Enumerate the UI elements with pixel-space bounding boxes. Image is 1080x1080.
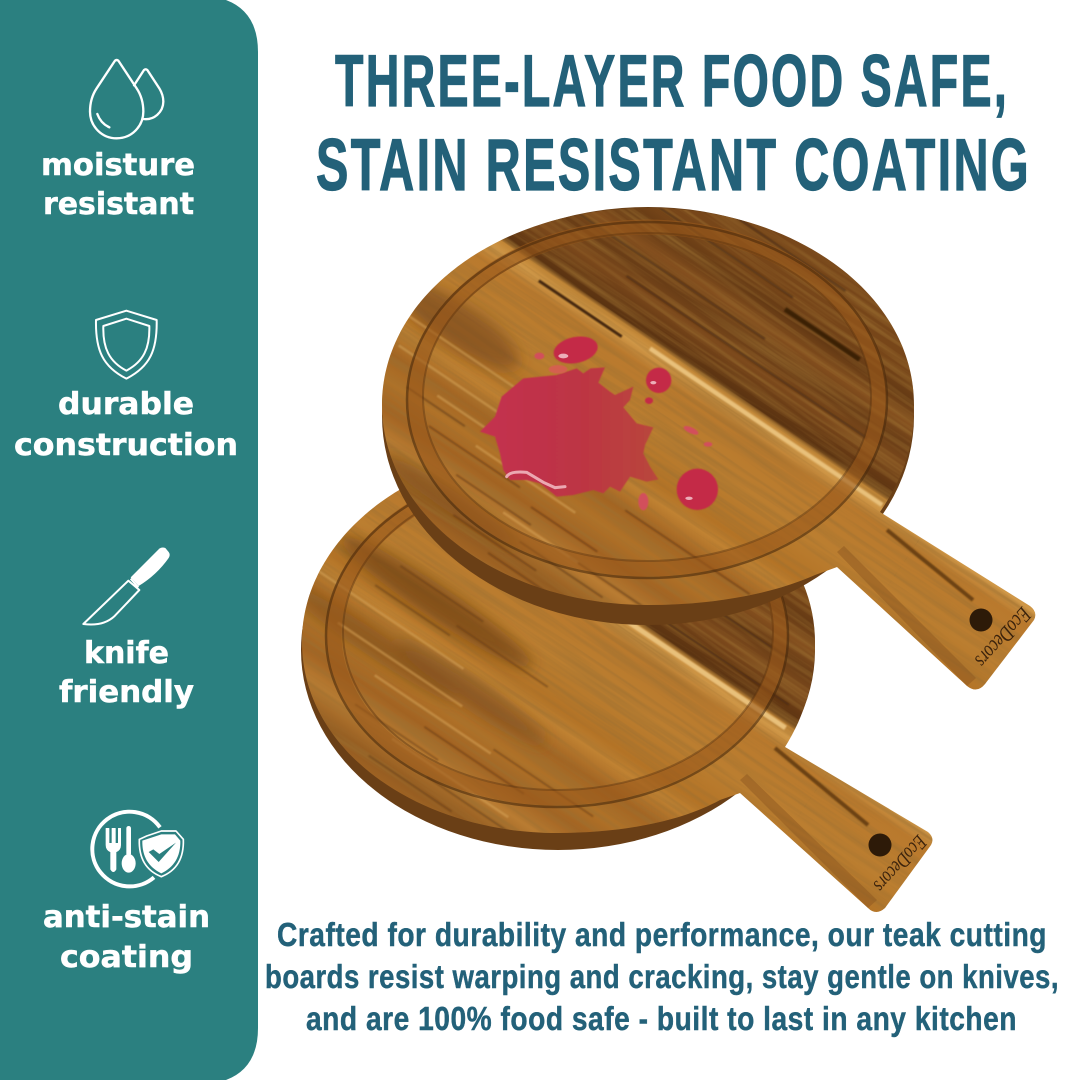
lower cutting board: [301, 207, 1023, 912]
board side thickness: [301, 450, 815, 850]
puddle highlight: [507, 472, 565, 488]
label: durable construction: [14, 387, 238, 463]
label: knife friendly: friendly: [59, 675, 194, 710]
label: durable construction: construction: [14, 428, 238, 463]
label: moisture resistant: resistant: [43, 187, 194, 222]
label: anti-stain coating: anti-stain: [43, 900, 210, 935]
icon: shield: [96, 311, 157, 379]
icon: water drops: [90, 60, 163, 138]
droplet highlights: [558, 354, 693, 500]
board side thickness: [382, 207, 914, 625]
hanging hole: [970, 608, 992, 632]
main puddle: [480, 367, 658, 497]
droplets: [534, 333, 718, 510]
label: knife friendly: knife: [84, 636, 169, 671]
board surface with grain: [382, 208, 1036, 690]
label: moisture resistant: moisture: [41, 148, 195, 183]
wine stain spill: [480, 333, 718, 510]
brand mark: EcoDecors: [970, 602, 1037, 673]
label: anti-stain coating: coating: [60, 940, 193, 975]
title: [316, 41, 1031, 206]
handle underside shade: [740, 774, 877, 908]
label: anti-stain coating: [43, 900, 210, 975]
icon: cutlery with shield: [92, 812, 183, 886]
hanging hole: [868, 834, 892, 856]
handle underside shade: [837, 546, 976, 686]
brand mark: EcoDecors: [869, 830, 933, 897]
upper cutting board: [382, 207, 1036, 690]
icon: knife: [83, 547, 170, 625]
juice groove: [415, 227, 879, 569]
label: moisture resistant: [41, 148, 195, 222]
handle dark grain streak: [887, 530, 973, 600]
label: knife friendly: [59, 636, 194, 710]
panel: teal sidebar: [0, 0, 258, 1080]
juice groove: [334, 470, 780, 798]
body text: [265, 916, 1059, 1037]
label: durable construction: durable: [58, 387, 194, 422]
handle dark grain streak: [775, 748, 868, 825]
board surface with grain: [302, 207, 1023, 912]
